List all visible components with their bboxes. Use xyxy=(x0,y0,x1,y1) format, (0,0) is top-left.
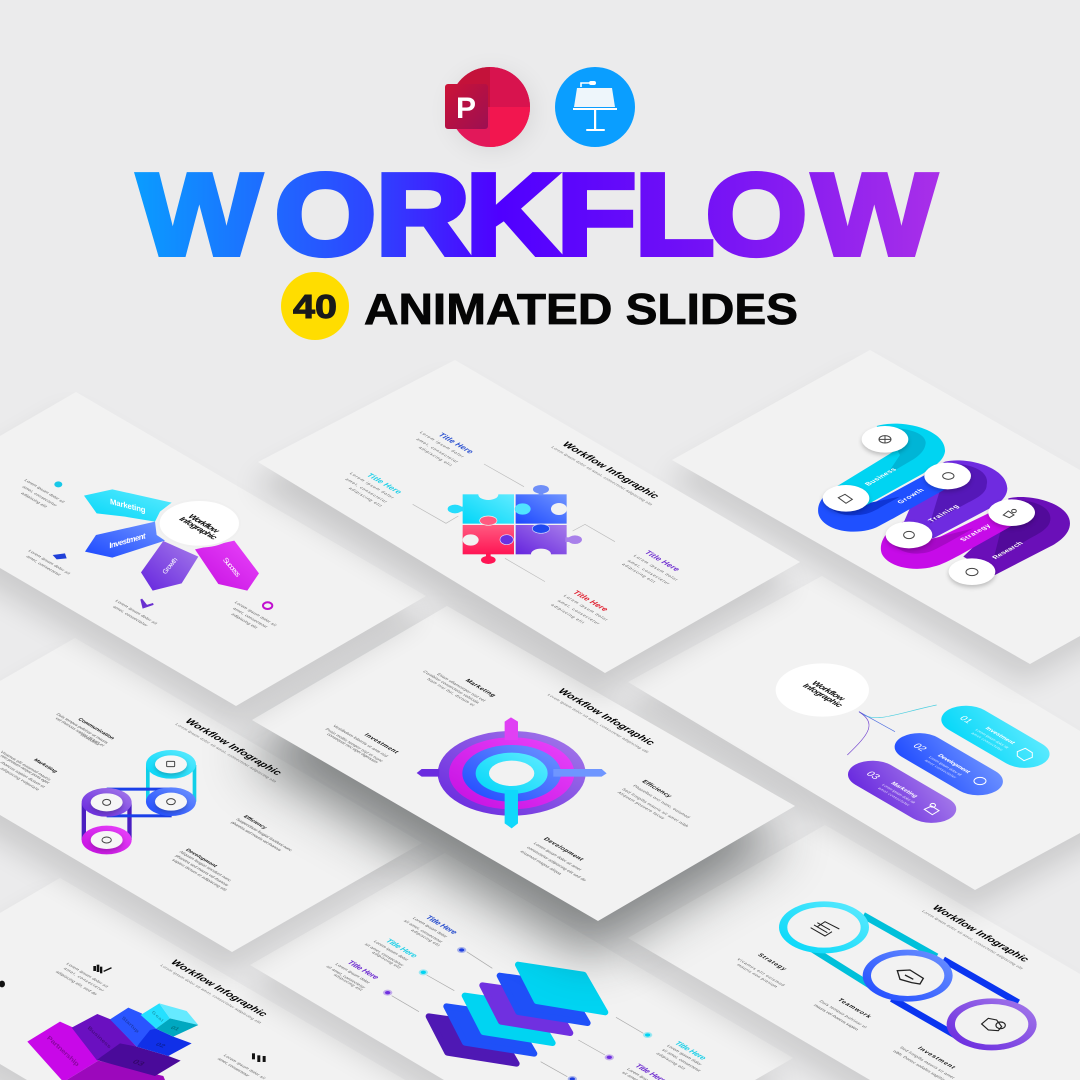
stacked layers diagram xyxy=(429,965,605,1064)
communication text: vel rhoncus sapien dictum et xyxy=(54,717,107,747)
text block: lower left: amet, consectetur xyxy=(25,555,63,577)
text block: bottom right: amet, consectetur xyxy=(232,607,270,629)
callout: red: amet, consectetur xyxy=(556,599,602,625)
callout: cyan xyxy=(344,472,405,508)
center circle: Infographic xyxy=(800,682,846,709)
arrow: growth xyxy=(141,541,198,591)
callout: blue top: sit amet, consectetur xyxy=(402,919,445,944)
callout: red: Title Here xyxy=(571,589,611,613)
cylinder caps with icons xyxy=(91,755,187,849)
ribbon: research: Research xyxy=(991,541,1025,560)
callout: cyan top: sit amet, consectetur xyxy=(363,942,406,967)
efficiency text: Phasellus orci nunc, euismod xyxy=(632,784,692,819)
callout: cyan bottom: Title Here xyxy=(672,1040,709,1061)
development text: Aliquam feugiat tincidunt nunc xyxy=(178,850,234,882)
marketing text: Vivamus elit euismod mauris xyxy=(0,750,52,781)
callout: blue top: Lorem ipsum dolor xyxy=(411,916,449,938)
icons xyxy=(838,436,1016,576)
badge: 40: 40 xyxy=(293,288,337,325)
slide: puzzle xyxy=(252,360,800,695)
callout: purple xyxy=(621,549,683,585)
text block: adipiscing elit, sed do xyxy=(54,970,99,996)
slide: arrows xyxy=(0,392,426,726)
callout: cyan: Title Here xyxy=(364,472,405,495)
efficiency text: Suspendisse feugiat tincidunt nunc xyxy=(235,817,295,852)
icons xyxy=(102,761,175,843)
slide: layers xyxy=(244,853,793,1080)
text block: top left: adipiscing elit xyxy=(20,491,49,509)
strategy text: Vivamus elit euismod xyxy=(736,957,787,987)
slide: numbered pills xyxy=(622,576,1080,912)
development text: Development xyxy=(542,837,586,862)
marketing text: Nam nisi dui, dictum et xyxy=(426,677,477,707)
heading: Workflow Infographic xyxy=(929,904,1032,964)
icon: left edge xyxy=(0,981,5,987)
badge: 40 xyxy=(281,272,349,340)
investment text: Proin mollis tempor nisl et nunc xyxy=(324,727,385,763)
heading: Workflow Infographic xyxy=(555,688,657,747)
teamwork text: mauris vel rhoncus sapien xyxy=(812,1003,861,1031)
callout: blue top xyxy=(402,914,460,947)
pill 02: amet consectetur xyxy=(923,759,959,779)
callout: cyan: Lorem ipsum dolor xyxy=(348,472,396,499)
pill 01: Investment xyxy=(983,726,1016,745)
cylinder diagram xyxy=(82,750,196,854)
subheading: Lorem ipsum dolor sit amet, consectetur adipiscing elit xyxy=(546,693,651,754)
arrow: marketing xyxy=(84,489,172,522)
stacked steps chart xyxy=(27,1003,198,1080)
callout: purple: Title Here xyxy=(642,549,683,573)
ribbon: business: Business xyxy=(864,467,899,487)
subheading: Lorem ipsum dolor sit amet, consectetur adipiscing elit xyxy=(921,909,1025,970)
heading: Workflow Infographic xyxy=(559,441,662,500)
step labels: Business xyxy=(86,1026,112,1051)
icon: handshake xyxy=(897,970,923,984)
ribbon: growth: Growth xyxy=(896,488,926,505)
heading: Workflow Infographic xyxy=(167,959,270,1018)
ribbon: training xyxy=(903,460,1007,538)
marketing text: Marketing xyxy=(463,678,497,698)
pill 03: Marketing xyxy=(889,781,919,799)
callout: cyan: adipiscing elit xyxy=(347,486,384,508)
text block: bottom right: Lorem ipsum dolor sit xyxy=(233,601,279,627)
pill 02: 02 xyxy=(910,742,929,753)
communication text: Communication xyxy=(76,717,116,740)
efficiency text: Efficiency xyxy=(640,779,674,799)
text block: lower left: Lorem ipsum dolor sit xyxy=(27,549,73,575)
callout: purple: Lorem ipsum dolor xyxy=(632,554,680,582)
step labels: 01 xyxy=(169,1025,181,1032)
callout: purple top: Title Here xyxy=(345,959,382,981)
step labels: Partnership xyxy=(46,1034,81,1068)
callout: blue: Lorem ipsum dolor xyxy=(418,431,466,458)
ribbon: growth xyxy=(818,475,947,532)
marketing text: Marketing xyxy=(32,758,59,774)
development text: pharetra sed mauris vel rhoncus xyxy=(174,854,230,887)
connector lines and dots xyxy=(383,947,652,1080)
marketing text: rhoncus sapien dictum et xyxy=(0,761,47,789)
ribbon: strategy: Strategy xyxy=(959,523,993,543)
leader lines xyxy=(413,464,615,582)
callout: purple top: Lorem ipsum dolor xyxy=(334,962,372,984)
strategy text: Strategy xyxy=(756,953,789,972)
investment text: Investment xyxy=(916,1046,958,1070)
arrow: investment xyxy=(85,522,165,558)
subtitle: ANIMATED SLIDES xyxy=(364,285,798,334)
callout: cyan top: adipiscing elit xyxy=(371,951,403,970)
investment text: consequat nec eget dignissim xyxy=(326,732,380,764)
strategy text: mauris non pretium xyxy=(736,963,779,988)
pill 01: 01 xyxy=(957,715,975,725)
callout: blue top: adipiscing elit xyxy=(410,928,442,947)
efficiency text: Sed fringilla mauris sit amet nibh xyxy=(621,787,690,828)
text block: bottom center: Lorem ipsum dolor sit xyxy=(114,599,159,625)
marketing text: Etiam ullamcorper nisl vel xyxy=(436,672,487,702)
callout: cyan bottom xyxy=(655,1040,709,1073)
development text: Development xyxy=(184,848,219,868)
development text: sapien dictum et adipiscing elit xyxy=(171,858,229,892)
text block xyxy=(54,962,110,996)
marketing text xyxy=(0,750,59,791)
communication text: Duis tempus pulvinar ut mauris xyxy=(55,712,110,744)
heading: Workflow Infographic xyxy=(182,718,284,777)
center circle: Workflow xyxy=(186,513,223,534)
arrow: investment: Investment xyxy=(109,531,146,550)
text block: top left: amet, consectetur xyxy=(21,485,59,507)
ribbon: research xyxy=(963,497,1070,575)
callout: red: Lorem ipsum dolor xyxy=(562,594,610,622)
white buttons xyxy=(823,426,1035,585)
pill 02: Lorem ipsum dolor sit xyxy=(927,755,964,777)
callout: red xyxy=(550,589,611,625)
arrow: growth: Growth xyxy=(161,556,179,576)
subheading: Lorem ipsum dolor sit amet, consectetur adipiscing elit xyxy=(159,964,264,1025)
callout: purple top: adipiscing elit xyxy=(332,973,365,992)
callout: purple: amet, consectetur xyxy=(626,559,672,585)
step labels: 02 xyxy=(154,1042,167,1049)
callout: cyan top: Title Here xyxy=(383,938,420,959)
subheading: Lorem ipsum dolor sit amet, consectetur adipiscing elit xyxy=(550,445,655,506)
efficiency text: Efficiency xyxy=(242,815,268,830)
investment text: Investment xyxy=(362,733,401,755)
text block: Lorem ipsum dolor sit xyxy=(222,1054,268,1080)
center circle xyxy=(159,500,240,547)
text block: top left: Lorem ipsum dolor sit xyxy=(23,478,67,504)
investment text: Vestibulum lobortis ut ante nisl xyxy=(332,724,389,758)
ribbon: training: Training xyxy=(927,504,961,523)
investment text xyxy=(324,724,401,764)
callout: cyan: amet, consectetur xyxy=(344,477,389,504)
pill 02: Development xyxy=(936,754,971,774)
pill 03: Lorem ipsum dolor sit xyxy=(881,783,918,804)
pill 03: amet consectetur xyxy=(877,786,912,807)
arrow: success xyxy=(195,541,259,591)
pill 03: 03 xyxy=(863,770,883,781)
target diagram xyxy=(417,717,607,828)
pill 01 xyxy=(931,700,1060,774)
pill 02 xyxy=(884,727,1013,801)
ribbon: business xyxy=(837,424,945,505)
subheading: Lorem ipsum dolor sit amet, consectetur adipiscing elit xyxy=(174,722,279,783)
arrow: marketing: Marketing xyxy=(110,497,146,515)
callout: blue top: Title Here xyxy=(423,914,460,936)
teamwork text: Duis tempus pulvinar ut xyxy=(818,999,869,1029)
marketing text: adipiscing vulputate xyxy=(0,767,41,791)
step labels xyxy=(46,1010,181,1068)
teamwork text: Teamwork xyxy=(836,998,873,1019)
icon: Keynote xyxy=(555,67,635,147)
ribbon: strategy xyxy=(881,513,1013,569)
text block: bottom center: amet, consectetur xyxy=(112,605,150,627)
slide: rings xyxy=(622,825,1080,1080)
investment text: Sed fringilla mauris sit amet xyxy=(898,1046,957,1080)
efficiency text: pharetra sed mauris vel rhoncus xyxy=(230,821,283,852)
callout: blue: Title Here xyxy=(436,432,477,455)
callout: red: adipiscing elit xyxy=(550,603,587,624)
icon: chart xyxy=(811,922,839,936)
title: WORKFLOW xyxy=(138,150,936,280)
callout: blue xyxy=(415,431,477,467)
callout: cyan top xyxy=(363,938,420,970)
callout: cyan bottom: Lorem ipsum dolor xyxy=(666,1044,704,1066)
icon: piggy bank xyxy=(982,1018,1005,1031)
step labels: Startup xyxy=(121,1016,140,1035)
connector curves xyxy=(847,705,937,755)
development text: consectetur adipiscing elit sed do xyxy=(526,846,588,882)
slide: target xyxy=(244,606,795,957)
callout: purple top: sit amet, consectetur xyxy=(325,965,367,989)
icon: PowerPoint: P xyxy=(456,92,476,125)
arrow: success: Success xyxy=(221,555,243,579)
text block: amet, consectetur xyxy=(216,1057,252,1077)
text block: Lorem ipsum dolor sit xyxy=(65,962,110,988)
pill 01: amet consectetur xyxy=(970,731,1005,752)
icon: PowerPoint xyxy=(445,67,530,147)
center circle: Infographic xyxy=(177,516,221,541)
step labels: 03 xyxy=(130,1058,147,1067)
slide: stacked steps xyxy=(0,878,405,1080)
development text: eiusmod magna aliqua xyxy=(519,850,564,876)
marketing text: non pretium neque porta eget xyxy=(0,754,52,785)
development text: Lorem ipsum dolor sit amet xyxy=(532,842,584,871)
pill 01: Lorem ipsum dolor sit xyxy=(974,728,1011,749)
callout: blue: amet, consectetur xyxy=(415,437,460,464)
icon: chart xyxy=(93,965,112,973)
marketing text: Curabitur consectetur vehicula xyxy=(422,670,481,704)
connected rings diagram xyxy=(779,901,1037,1050)
callout: blue: adipiscing elit xyxy=(417,446,454,467)
callout: cyan bottom: sit amet, consectetur xyxy=(661,1048,703,1073)
text block: bottom right: adipiscing elit xyxy=(230,612,260,629)
slide: ribbons xyxy=(666,350,1080,684)
callout: cyan top: Lorem ipsum dolor xyxy=(372,940,410,962)
center circle xyxy=(776,663,869,717)
slide: cylinders xyxy=(0,638,422,974)
callout: purple: adipiscing elit xyxy=(621,562,658,584)
callout: cyan bottom: adipiscing elit xyxy=(655,1052,688,1071)
puzzle diagram xyxy=(448,485,582,564)
communication text: consectetur xyxy=(79,733,102,746)
text block: amet, consectetur xyxy=(62,967,106,992)
step labels: Goal xyxy=(151,1010,164,1024)
callout: purple top xyxy=(325,959,382,992)
efficiency text: Aliquam posuere lacus xyxy=(616,791,666,820)
pill 03 xyxy=(837,755,967,829)
center circle: Workflow xyxy=(809,680,848,702)
icon: people xyxy=(252,1053,266,1062)
